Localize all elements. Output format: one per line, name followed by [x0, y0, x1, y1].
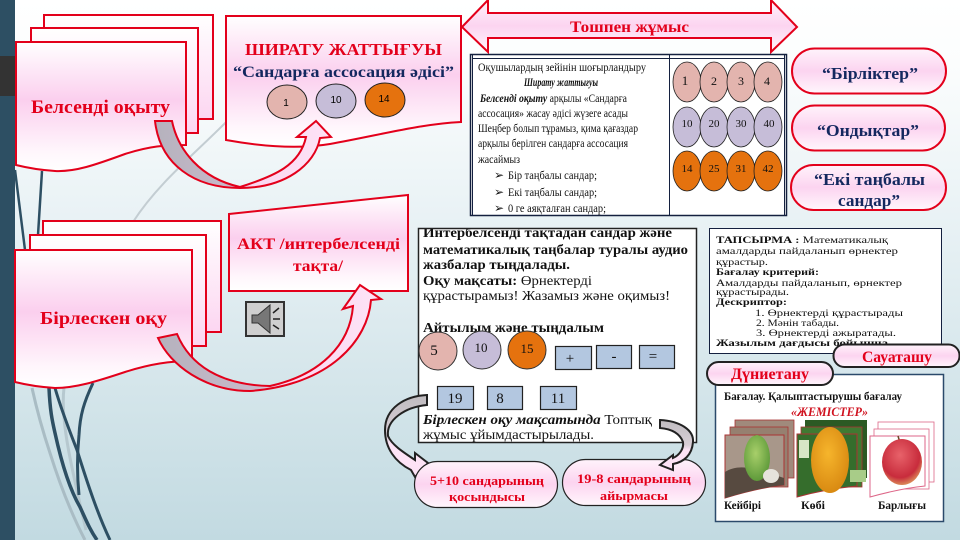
panel: lesson table: 40: [764, 118, 775, 130]
heading: Тошпен жұмыс: Тошпен жұмыс: [570, 19, 689, 36]
pill: Екі таңбалы сандар: [791, 165, 946, 210]
table text: Шеңбер болып тұрамыз, қима қағаздар: [478, 121, 638, 135]
pill: Бірліктер: “Бірліктер”: [822, 64, 918, 83]
task text: [716, 236, 904, 349]
fruit labels: Кейбірі: [724, 498, 762, 512]
table text: Екі таңбалы сандар;: [508, 185, 597, 199]
number circles: 14: [378, 94, 390, 105]
table text: ➢: [494, 168, 504, 182]
panel: interactive board text: 11: [551, 391, 565, 407]
number circles: [419, 331, 546, 370]
arrow: Топтық to difference oval: [660, 420, 693, 470]
panel: assessment: [716, 374, 944, 522]
number circles: 1: [283, 98, 289, 109]
arrow: 19 to sum oval: [385, 395, 428, 477]
fruit image: green apple: [725, 420, 794, 498]
panel: lesson table: 25: [708, 163, 720, 175]
panel: interactive board text: 8: [496, 391, 504, 407]
heading: Ширату жаттығуы: ШИРАТУ ЖАТТЫҒУЫ: [245, 40, 442, 59]
task text: Дескриптор:: [716, 298, 787, 308]
oval: 19-8 difference: [562, 460, 706, 506]
panel: lesson table: 42: [762, 163, 774, 175]
panel: task: [710, 228, 942, 354]
table text: жасаймыз: [477, 152, 520, 166]
table text: [477, 60, 646, 215]
board text: математикалық таңбалар туралы аудио: [423, 242, 688, 257]
oval: 5+10 sum: [414, 462, 558, 508]
tag: Сауаташу: Сауаташу: [862, 349, 932, 366]
icon: speaker: [246, 302, 284, 336]
fruit labels: [724, 498, 927, 512]
fruit labels: Барлығы: [878, 498, 927, 512]
table text: ассосация» жасау әдісі жүзеге асады: [478, 106, 628, 120]
arrow: Топтық double arrow: [462, 0, 797, 52]
panel: АКТ интербелсенді тақта: тақта/: [293, 258, 344, 275]
task text: құрастыр.: [716, 258, 768, 268]
assessment heading: Бағалау. Қалыптастырушы бағалау: [724, 389, 902, 403]
panel: interactive board text: 15: [520, 341, 534, 356]
pill: Екі таңбалы сандар: сандар”: [838, 191, 900, 210]
task text: ТАПСЫРМА : Математикалық: [716, 236, 889, 246]
panel: interactive board text: [418, 225, 696, 442]
panel: lesson table: [470, 54, 786, 216]
board text: [422, 225, 688, 442]
panel: interactive board text: 5: [430, 343, 438, 359]
fruit image: orange fruit: [797, 420, 867, 497]
task text: Жазылым дағдысы бойынша: [716, 338, 888, 349]
panel: lesson table: 14: [682, 163, 693, 175]
arrow: Бірлескен оқу to АКТ: [158, 285, 381, 391]
panel: interactive board text: =: [649, 349, 657, 365]
pill: Ондықтар: “Ондықтар”: [817, 121, 919, 140]
panel: lesson table: 3: [738, 74, 744, 88]
fruit image: red apple: [870, 422, 934, 497]
task text: 2. Мәнін табады.: [756, 318, 839, 329]
table text: 0 ге аяқталған сандар;: [508, 201, 606, 215]
pill: Бірліктер: [792, 48, 946, 94]
panel: lesson table: 30: [736, 118, 747, 130]
number circles grid: [673, 62, 782, 191]
board text: Бірлескен оқу мақсатында Топтық: [422, 412, 652, 427]
table text: арқылы берілген сандарға ассосация: [478, 136, 628, 150]
task text: 3. Өрнектерді ажыратады.: [756, 329, 896, 339]
left side bar: [0, 0, 15, 540]
heading: Белсенді оқыту: Белсенді оқыту: [31, 98, 171, 118]
subheading: method name: “Сандарға ассосация әдісі”: [233, 64, 454, 81]
panel: Бірлескен оқу stacked cards: [15, 221, 221, 388]
panel: lesson table: 10: [682, 118, 693, 130]
pill: Екі таңбалы сандар: “Екі таңбалы: [814, 170, 925, 189]
heading: Бірлескен оқу: Бірлескен оқу: [40, 308, 167, 328]
fruit labels: Көбі: [801, 498, 826, 512]
panel: Белсенді оқыту stacked cards: [16, 15, 213, 171]
pill: Ондықтар: [792, 106, 945, 150]
task text: Бағалау критерий:: [716, 267, 819, 278]
board text: жұмыс ұйымдастырылады.: [422, 427, 594, 442]
board text: Интербелсенді тақтадан сандар және: [423, 225, 672, 240]
number circles: 10: [330, 95, 342, 106]
panel: Ширату жаттығуы: [226, 16, 461, 147]
decorative background lines: [15, 108, 240, 540]
task text: құрастырады.: [716, 288, 789, 298]
tag: Сауаташу: [834, 344, 960, 367]
oval: 5+10 sum: қосындысы: [449, 489, 525, 504]
arrow: Белсенді оқыту to Ширату: [155, 121, 331, 188]
panel: lesson table: 4: [764, 74, 770, 88]
panel: interactive board text: +: [566, 351, 574, 367]
tag: Дүниетану: [707, 362, 833, 385]
symbol and number tiles: [438, 346, 674, 410]
assessment subtitle: «ЖЕМІСТЕР»: [791, 405, 868, 419]
panel: interactive board text: 10: [474, 340, 488, 355]
number circles: [267, 83, 405, 119]
panel: lesson table: 20: [708, 118, 720, 130]
table text: Бір таңбалы сандар;: [508, 168, 597, 182]
heading: АКТ: АКТ /интербелсенді: [237, 236, 401, 253]
panel: АКТ интербелсенді тақта: [229, 195, 408, 291]
task text: 1. Өрнектерді құрастырады: [755, 309, 904, 319]
panel: interactive board text: -: [612, 349, 616, 365]
board text: Оқу мақсаты: Өрнектерді: [423, 273, 592, 288]
table text: ➢: [494, 185, 504, 199]
oval: 19-8 difference: айырмасы: [600, 488, 668, 503]
oval: 19-8 difference: 19-8 сандарының: [577, 471, 692, 486]
oval: 5+10 sum: 5+10 сандарының: [430, 473, 545, 488]
panel: lesson table: 1: [682, 73, 688, 88]
tag: Дүниетану: Дүниетану: [731, 366, 809, 383]
table text: Ширату жаттығуы: [523, 75, 598, 89]
task text: Амалдарды пайдаланып, өрнектер: [716, 278, 902, 289]
table text: Оқушылардың зейінін шоғырландыру: [478, 60, 646, 74]
board text: Айтылым және тыңдалым: [423, 320, 604, 335]
panel: lesson table: 2: [711, 74, 717, 88]
panel: interactive board text: 19: [448, 391, 462, 407]
task text: амалдарды пайдаланып өрнектер: [716, 246, 898, 257]
board text: жазбалар тыңдалады.: [423, 257, 570, 272]
board text: құрастырамыз! Жазамыз және оқимыз!: [423, 288, 670, 303]
table text: Белсенді оқыту арқылы «Сандарға: [479, 91, 628, 105]
panel: lesson table: 31: [736, 163, 746, 175]
table text: ➢: [494, 201, 504, 215]
